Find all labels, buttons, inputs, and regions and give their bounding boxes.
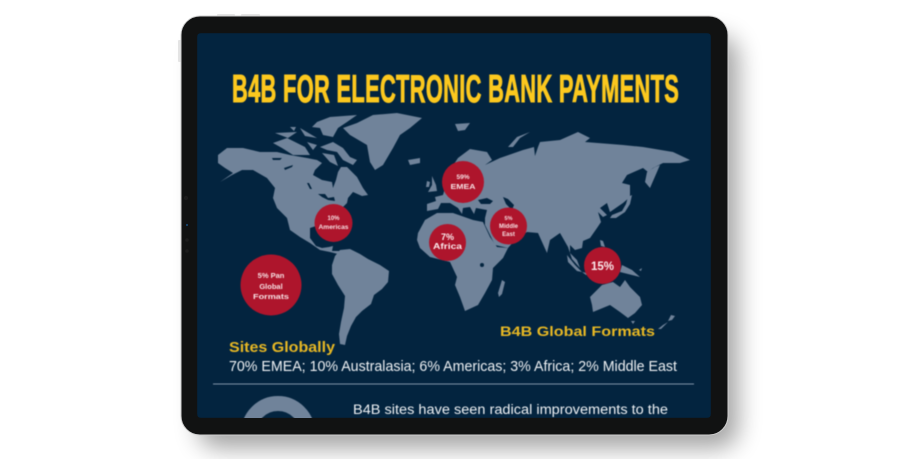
heading: B4B Global Formats: B4B Global Formats: [500, 323, 655, 339]
New Guinea: [620, 265, 642, 277]
callout: Middle East: 5%: [505, 216, 513, 222]
New Zealand: [658, 315, 675, 329]
Australia: [590, 280, 642, 324]
title: B4B FOR ELECTRONIC BANK PAYMENTS: [232, 66, 679, 111]
tablet infographic: [178, 14, 753, 459]
tablet drop shadow: [198, 36, 738, 448]
sites globally breakdown: 70% EMEA; 10% Australasia; 6% Americas; 3% Africa; 2% Middle East: [229, 359, 677, 375]
callout: Asia Pacific: [584, 247, 621, 284]
tablet side buttons: [178, 14, 260, 62]
callout: EMEA: [442, 161, 484, 203]
callout: EMEA: 59%: [456, 174, 470, 181]
Madagascar: [498, 280, 505, 297]
heading: Sites Globally: Sites Globally: [229, 339, 336, 356]
callout: Pan Global Formats: 5% Pan: [258, 271, 285, 280]
callout: Africa: 7%: [441, 232, 454, 242]
body paragraph: B4B sites have seen radical improvements to the: [353, 402, 668, 417]
callout: Pan Global Formats: Formats: [253, 292, 289, 301]
Africa: [417, 213, 508, 311]
callout: Africa: [429, 224, 466, 261]
callout: Americas: 10%: [327, 216, 340, 222]
callout: Americas: [314, 204, 352, 242]
callout: Middle East: Middle: [499, 224, 519, 230]
callout: Americas: Americas: [318, 224, 349, 231]
callout: Middle East: East: [502, 232, 515, 238]
Eurasia: [427, 132, 690, 268]
Lake Victoria: [480, 263, 484, 267]
callout: Pan Global Formats: [240, 254, 302, 316]
callout: Pan Global Formats: Global: [259, 282, 283, 291]
callout: Middle East: [490, 208, 527, 244]
Iceland and UK: [408, 158, 437, 192]
Indonesia and Philippines: [567, 240, 605, 275]
world map: [218, 113, 690, 345]
tablet screen: [197, 33, 711, 459]
Arctic islands: [273, 115, 357, 166]
Novaya Zemlya and Svalbard: [455, 123, 530, 147]
callout: EMEA: EMEA: [450, 184, 476, 191]
Japan and Kamchatka: [610, 165, 660, 218]
Greenland: [343, 113, 422, 170]
callout: Africa: Africa: [433, 241, 462, 251]
Great Lakes: [272, 158, 335, 201]
tablet body: [181, 16, 728, 435]
tablet camera dots: [184, 196, 189, 253]
Black Sea and Caspian Sea: [478, 197, 514, 210]
South America: [332, 249, 389, 345]
callout: Asia Pacific: 15%: [591, 259, 614, 273]
ring icon: [244, 395, 312, 418]
North America: [218, 148, 368, 254]
